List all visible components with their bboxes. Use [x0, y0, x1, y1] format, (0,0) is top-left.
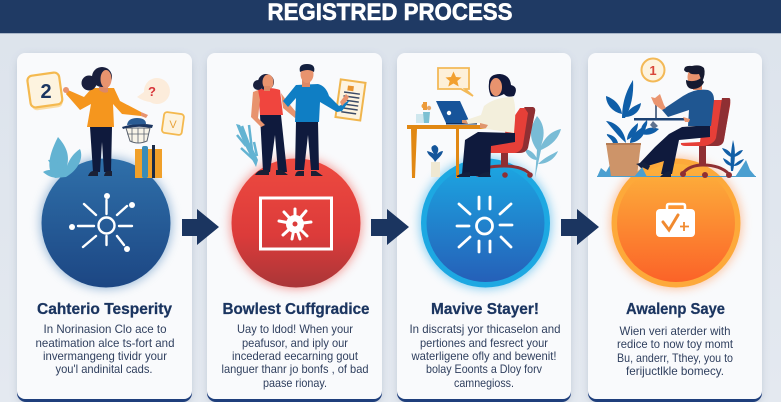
heading: Awalenp Saye [626, 301, 725, 318]
panel: step 3 [397, 53, 571, 402]
description: incederad eecarning gout [232, 349, 359, 363]
description: bolay Eoonts a Dloy forv [426, 362, 542, 376]
description: Bu, anderr, Tthey, you to [617, 351, 733, 365]
description: Wien veri aterder with [620, 324, 730, 338]
blue circle [40, 157, 172, 289]
arrow 1 [182, 209, 219, 245]
description: Uay to ldod! When your [237, 322, 353, 336]
description: paase rionay. [263, 376, 327, 390]
description: peafusor, and iply our [242, 336, 348, 350]
description: In Norinasion Clo ace to [44, 322, 167, 336]
light blue circle [420, 157, 552, 289]
illustration: couple with clipboard [236, 64, 366, 176]
arrow 2 [371, 209, 409, 245]
panel: step 4 [588, 53, 762, 402]
heading: Cahterio Tesperity [37, 301, 172, 318]
orange circle [610, 157, 742, 289]
description [222, 322, 368, 390]
illustration: woman with question cards: ? [148, 84, 156, 99]
description: ferijuctlkle bomecy. [626, 364, 724, 378]
heading: Mavive Stayer! [431, 301, 539, 318]
description: invermangeng tividr your [43, 349, 167, 363]
icon: briefcase with check [656, 204, 695, 237]
description: camnegioss. [454, 376, 514, 390]
description: languer thanr jo bonfs , of bad [222, 362, 368, 376]
illustration: woman with question cards: V [169, 119, 177, 131]
illustration: man in chair with plant: 1 [649, 63, 657, 78]
panel: step 2 [207, 53, 382, 402]
red circle [230, 157, 362, 289]
description: redice to now toy momt [617, 337, 734, 351]
description [36, 322, 174, 376]
illustration: woman with question cards [27, 67, 184, 178]
icon: network sun [69, 193, 135, 252]
description [410, 322, 560, 390]
header bar [0, 0, 781, 34]
icon: framed virus sun [260, 198, 332, 249]
description [617, 324, 734, 378]
description: neatimation alce ts-fort and [36, 336, 174, 350]
description: you'l andinital cads. [56, 362, 152, 376]
panel: step 1 [17, 53, 192, 402]
illustration: woman with question cards: 2 [40, 81, 52, 103]
description: waterligene ofly and bewenit! [411, 349, 556, 363]
description: pertiones and fesrect your [420, 336, 548, 350]
description: In discratsj yor thicaselon and [410, 322, 560, 336]
heading: Bowlest Cuffgradice [222, 301, 370, 318]
illustration: woman at laptop [407, 68, 561, 178]
arrow 3 [561, 209, 599, 245]
illustration: man in chair with plant [597, 58, 756, 178]
icon: sun [457, 197, 512, 252]
